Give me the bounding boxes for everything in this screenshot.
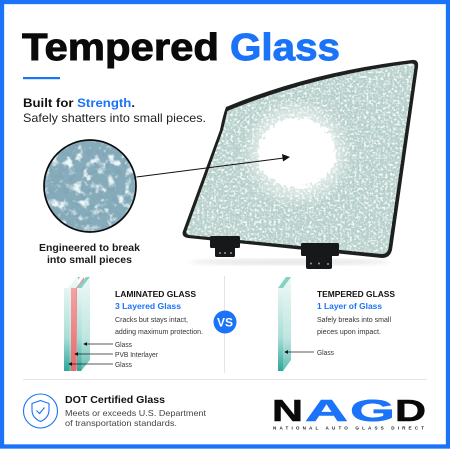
tempered glass text: TEMPERED GLASS xyxy=(317,289,395,299)
mounting clip left xyxy=(210,236,240,257)
tempered glass text: pieces upon impact. xyxy=(317,329,381,336)
laminated glass text: adding maximum protection. xyxy=(115,329,203,336)
subheading: Built for Strength . xyxy=(23,96,135,110)
title: Glass xyxy=(230,27,340,69)
laminated glass text: 3 Layered Glass xyxy=(115,301,181,311)
title: Tempered xyxy=(22,27,219,69)
tempered glass text: 1 Layer of Glass xyxy=(317,301,382,311)
DOT certification text: Meets or exceeds U.S. Department xyxy=(65,408,207,418)
pointer arrow xyxy=(136,154,290,177)
NAGD logo: A xyxy=(305,394,348,428)
windshield: shattered tempered glass pane xyxy=(180,55,420,269)
vertical divider xyxy=(224,276,226,373)
tempered glass text xyxy=(317,289,395,357)
laminated glass leaders xyxy=(69,344,113,364)
circle caption: into small pieces xyxy=(47,255,132,266)
mounting clip right xyxy=(301,243,339,269)
horizontal divider xyxy=(23,378,427,380)
DOT certification text: DOT Certified Glass xyxy=(65,395,165,406)
VS badge xyxy=(214,310,236,334)
laminated glass text: Cracks but stays intact, xyxy=(115,317,188,324)
pane glass xyxy=(186,64,415,254)
floor shadow xyxy=(190,259,390,265)
pane frame xyxy=(183,60,418,258)
NAGD logo: G xyxy=(350,394,395,428)
magnified glass circle xyxy=(43,139,137,233)
laminated glass text: LAMINATED GLASS xyxy=(115,289,196,299)
DOT certification text xyxy=(65,395,207,428)
title underline xyxy=(23,77,60,79)
VS badge: VS xyxy=(217,316,233,330)
tempered glass illustration xyxy=(278,277,291,371)
tempered glass text: Safely breaks into small xyxy=(317,317,391,324)
tempered glass text: Glass xyxy=(317,350,334,357)
circle caption xyxy=(39,243,140,266)
laminated glass illustration xyxy=(64,277,90,371)
laminated glass text: Glass xyxy=(115,362,132,369)
tempered glass leader xyxy=(285,351,314,353)
circle caption: Engineered to break xyxy=(39,243,140,254)
subheading: Safely shatters into small pieces. xyxy=(23,111,206,125)
DOT certification text: of transportation standards. xyxy=(65,418,177,428)
subheading xyxy=(23,96,206,125)
NAGD logo: NATIONAL AUTO GLASS DIRECT xyxy=(273,426,424,430)
laminated glass text: PVB Interlayer xyxy=(115,352,159,359)
title xyxy=(22,27,340,69)
icon: DOT shield xyxy=(24,394,58,428)
NAGD logo xyxy=(272,394,426,430)
laminated glass text xyxy=(115,289,203,369)
NAGD logo: N xyxy=(272,394,303,428)
laminated glass text: Glass xyxy=(115,342,132,349)
NAGD logo: D xyxy=(395,394,426,428)
